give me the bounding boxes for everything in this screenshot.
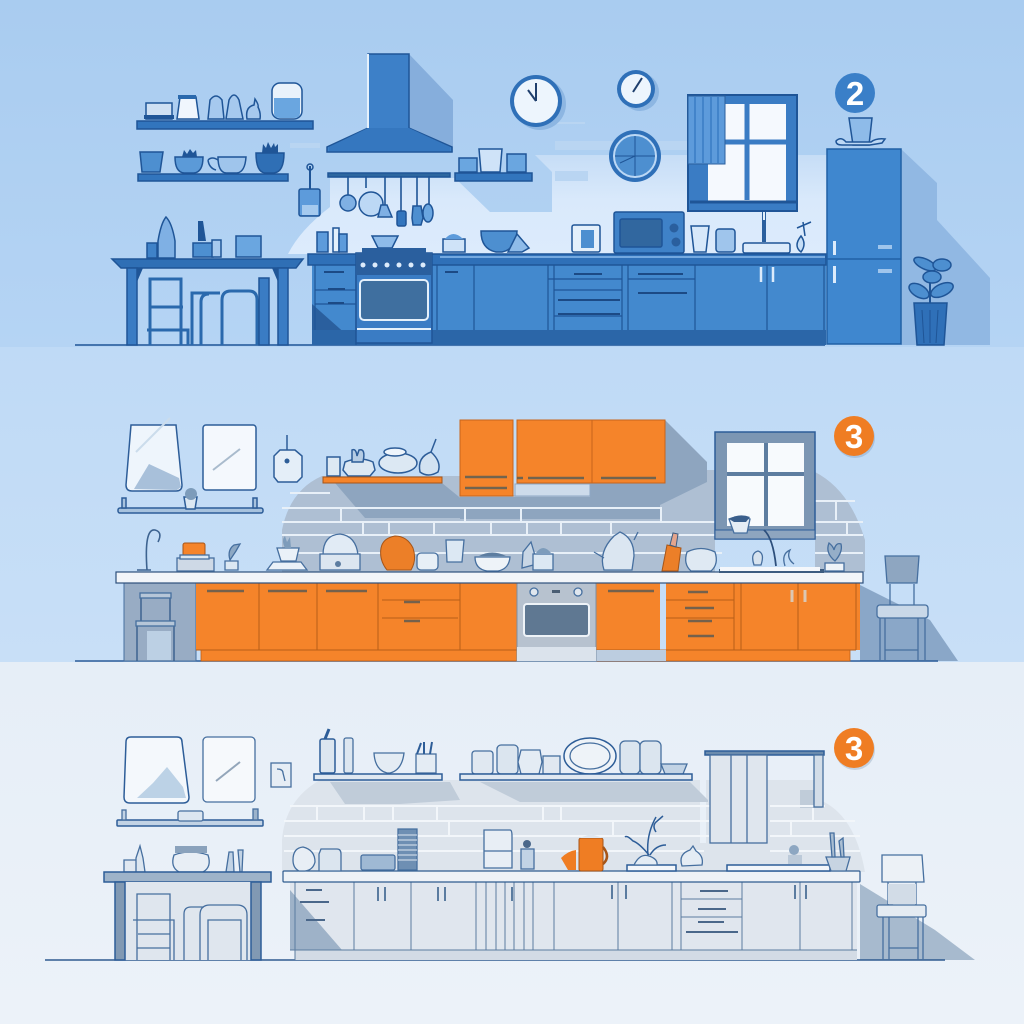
- floor shadow: [860, 585, 958, 661]
- frame 1: [124, 737, 189, 803]
- towel curtain rail: [705, 751, 824, 843]
- table and stools: [104, 846, 271, 960]
- fridge shadow and fridge: [827, 149, 990, 345]
- chair: [877, 556, 928, 661]
- shelf with bottles and bowl: [314, 729, 442, 780]
- badge 3: 3: [845, 418, 863, 455]
- base cabinets: [308, 254, 826, 345]
- frame 1: [126, 418, 182, 491]
- wall cabinets: [460, 420, 665, 496]
- wall clock small: [617, 70, 659, 111]
- floor line: [75, 660, 938, 662]
- left shelf: [117, 809, 263, 826]
- sink faucet: [719, 530, 844, 571]
- base cabinets white: [290, 882, 857, 960]
- badge 2: 2: [846, 75, 864, 112]
- counter appliances: [320, 534, 553, 571]
- chair: [877, 855, 926, 960]
- long shelf with jars: [460, 738, 692, 780]
- panel: orange kitchen: [0, 347, 1024, 662]
- counter jars and containers: [293, 829, 534, 871]
- range hood: [327, 54, 453, 152]
- window: [715, 432, 815, 539]
- lower shelf: [118, 488, 263, 513]
- floor shadow and line: [75, 344, 825, 346]
- panel: white kitchen: [0, 662, 1024, 1024]
- badge 3: [834, 728, 875, 770]
- badge 3: [834, 416, 875, 458]
- shelf with jars: [137, 83, 313, 129]
- brick arch backsplash: [282, 420, 865, 572]
- wall clock blue: [609, 130, 661, 182]
- potted plant: [906, 254, 955, 345]
- frame 2: [203, 425, 256, 490]
- glass on fridge: [836, 118, 885, 145]
- plant on board: [625, 816, 702, 871]
- floor line: [45, 959, 945, 961]
- stove top items: [317, 228, 529, 253]
- counter items left: [137, 530, 307, 571]
- badge 3: 3: [845, 730, 863, 767]
- kettle knife block bowl: [594, 532, 716, 571]
- countertop: [116, 572, 863, 583]
- utensil rail: [328, 173, 450, 226]
- small shelf with containers: [455, 149, 532, 181]
- stool under counter: [136, 593, 175, 661]
- shelf with bowls: [138, 142, 288, 181]
- hanging kettle canister: [299, 164, 320, 216]
- orange shelf with pots: [323, 439, 442, 483]
- window with curtain: [688, 95, 797, 211]
- frame 2: [203, 737, 255, 802]
- counter shadow: [290, 884, 975, 960]
- base cabinets orange: [124, 583, 860, 661]
- countertop: [283, 871, 860, 882]
- oven: [517, 583, 596, 661]
- sink area: [727, 833, 850, 871]
- brick arch backsplash: [282, 780, 865, 872]
- wall tag: [274, 435, 302, 482]
- orange pitcher: [561, 834, 607, 871]
- wall clock large: [510, 75, 566, 130]
- small wall plaque: [271, 763, 291, 787]
- stove: [356, 253, 432, 343]
- wall light pool: [288, 122, 830, 254]
- table with stools: [112, 217, 303, 345]
- panel: blue kitchen: [0, 0, 1024, 347]
- sink and jars: [691, 205, 811, 253]
- coffee maker and microwave: [572, 212, 684, 253]
- badge 2: [835, 73, 875, 113]
